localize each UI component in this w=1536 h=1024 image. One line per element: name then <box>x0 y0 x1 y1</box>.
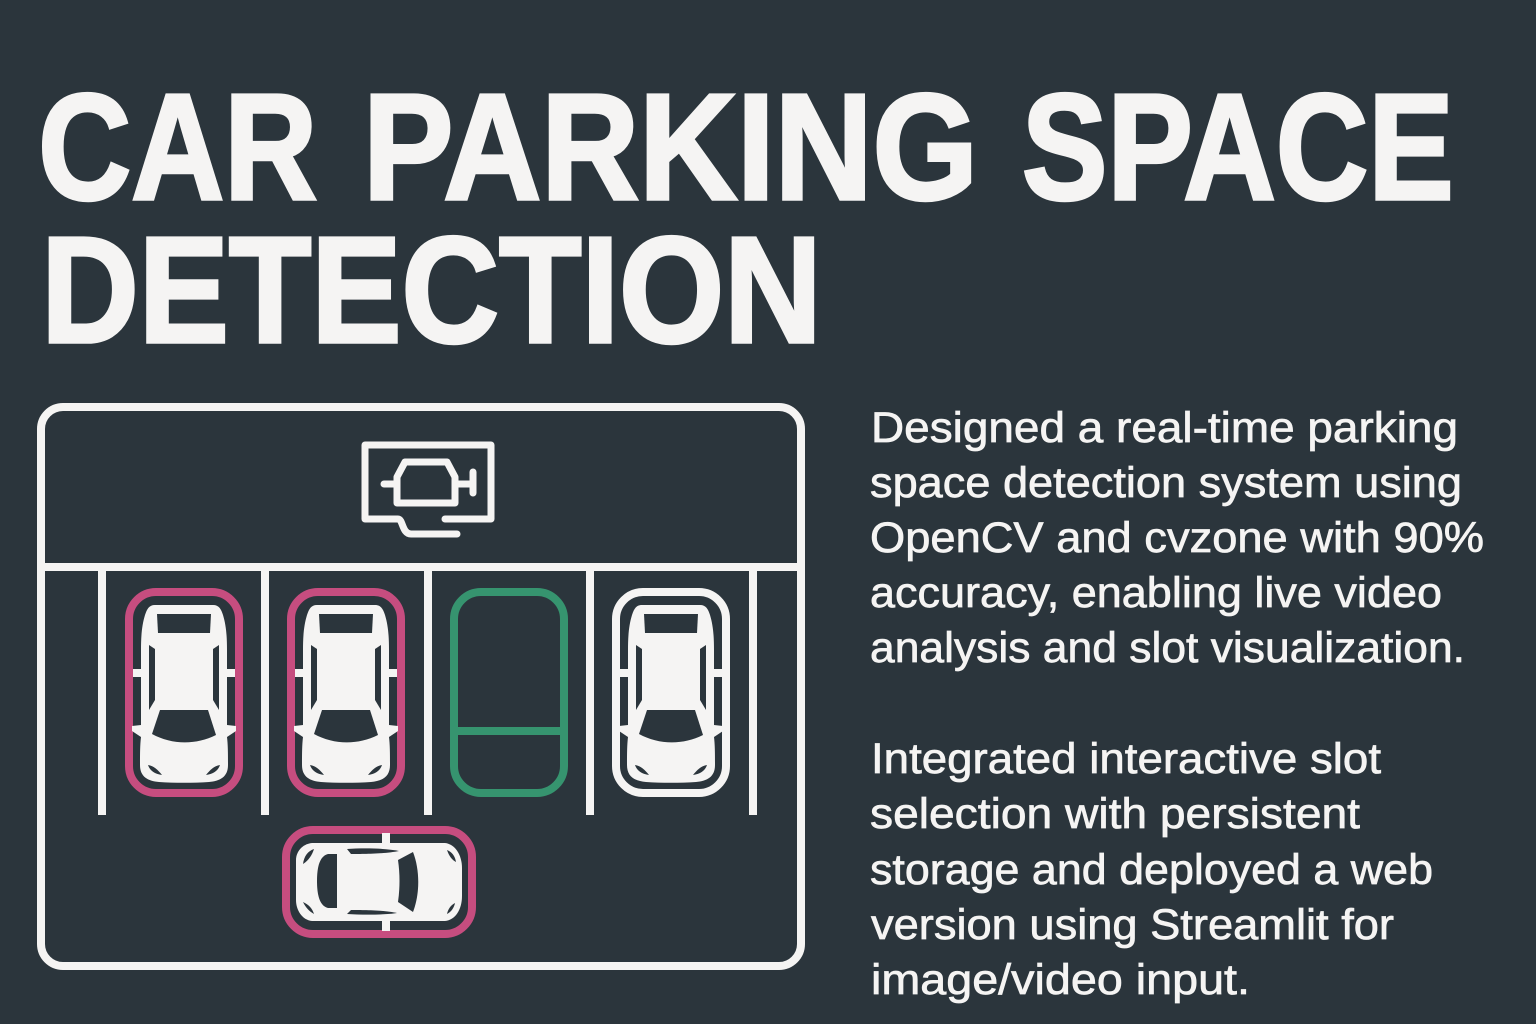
text block: integration and deployment: selection with persistent <box>870 790 1360 838</box>
title: PARKING <box>363 62 978 231</box>
text block: project summary: OpenCV and cvzone with 90% <box>870 514 1484 562</box>
panel: parking lot diagram <box>41 407 801 966</box>
lane divider line and slot lines <box>41 563 801 815</box>
text block: project summary: space detection system using <box>870 459 1462 507</box>
text block: project summary: Designed a real-time parking <box>871 404 1458 452</box>
parking lot outer frame <box>41 407 801 966</box>
text block: integration and deployment: Integrated interactive slot <box>871 735 1381 783</box>
text block: integration and deployment: storage and deployed a web <box>870 846 1433 894</box>
occupied bottom slot with horizontal car <box>286 830 472 934</box>
text block: integration and deployment: image/video input. <box>871 956 1250 1004</box>
text block: integration and deployment: version using Streamlit for <box>871 901 1394 949</box>
icon: monitor with camera <box>365 445 491 534</box>
text block: project summary: accuracy, enabling live video <box>870 569 1442 617</box>
title: SPACE <box>1022 62 1454 231</box>
slot 4 with car (white outline) <box>616 592 726 793</box>
title: DETECTION <box>41 205 822 374</box>
occupied slot 2 with car <box>291 592 401 793</box>
text block: project summary <box>870 404 1484 672</box>
free slot 3 (green) <box>454 592 564 793</box>
text block: integration and deployment <box>870 735 1433 1004</box>
occupied slot 1 with car <box>129 592 239 793</box>
title <box>38 62 1454 374</box>
text block: project summary: analysis and slot visualization. <box>870 624 1465 672</box>
title: CAR <box>38 62 317 231</box>
